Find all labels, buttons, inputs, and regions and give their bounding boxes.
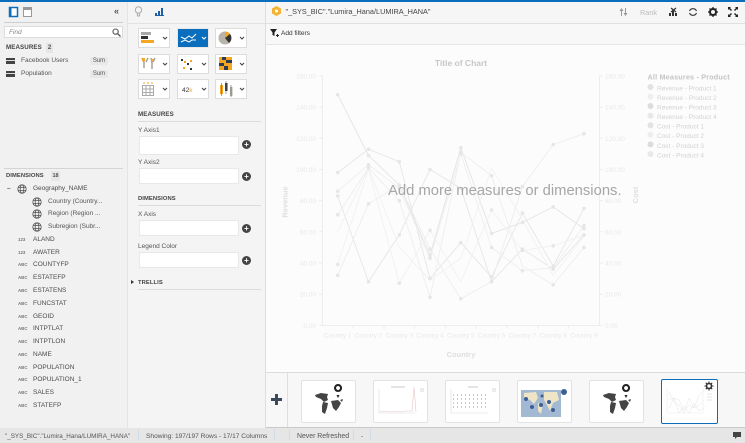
chart type: funnel <box>138 54 170 74</box>
add filters label: Add filters <box>281 30 310 36</box>
status separator <box>274 429 275 440</box>
series points <box>336 93 586 301</box>
hierarchy: Geography_NAME: Geography_NAME <box>33 185 88 192</box>
field: SALES: SALES <box>33 389 54 396</box>
axis titles: Country <box>447 350 476 359</box>
icon: bar chart tab <box>155 8 164 16</box>
measures count <box>46 43 53 53</box>
label: Legend Color: Legend Color <box>138 243 177 250</box>
add button: Y Axis1: + <box>244 140 249 149</box>
measures rule <box>138 121 261 122</box>
drop zone: Y Axis1 <box>139 136 239 155</box>
measures count: 2 <box>48 44 51 51</box>
thumbnail: empty map 1 <box>300 380 356 423</box>
icon: light bulb <box>134 6 142 16</box>
field: POPULATION_1: POPULATION_1 <box>33 376 82 383</box>
field: FUNCSTAT: ABC <box>18 300 28 306</box>
line chart <box>280 58 730 359</box>
field: NAME <box>18 350 52 358</box>
icon: search <box>112 28 121 37</box>
dimensions divider <box>4 168 123 169</box>
category labels: Country 2 <box>355 332 383 340</box>
add visualization button <box>271 394 282 405</box>
trellis heading: TRELLIS <box>138 280 163 286</box>
panel: chart configuration <box>128 2 266 428</box>
chart type: line (selected) <box>176 28 208 48</box>
field: ALAND: ALAND <box>33 236 55 242</box>
field: AWATER: AWATER <box>33 248 60 256</box>
axis titles <box>280 186 640 359</box>
field: STATEFP: STATEFP <box>33 402 61 408</box>
trellis rule <box>138 289 261 290</box>
icon: feedback <box>733 432 741 439</box>
category labels: Country 4 <box>416 332 444 340</box>
trellis expander <box>131 280 134 284</box>
field: INTPTLAT: INTPTLAT <box>33 325 63 332</box>
drop zone: Y Axis2 <box>139 168 239 184</box>
panel: header bar <box>266 2 745 24</box>
panel: status bar <box>0 428 745 443</box>
empty-state message: Add more measures or dimensions. <box>388 183 622 199</box>
series lines <box>338 95 584 299</box>
field: COUNTYFP: ABC <box>18 262 28 267</box>
label: X Axis: X Axis <box>138 210 156 218</box>
status separator <box>370 429 371 440</box>
chart type: numeric point: 42k <box>182 87 193 94</box>
left axis labels: 160.00 <box>296 74 316 80</box>
status: refresh state: Never Refreshed <box>297 432 349 440</box>
dimensions heading: DIMENSIONS <box>6 173 44 179</box>
level: Subregion: Subregion (Subr... <box>48 223 100 230</box>
left axis labels: 120.00 <box>296 136 316 143</box>
category labels: Country 5 <box>447 332 475 340</box>
add button: X Axis <box>242 224 251 233</box>
dimensions count: 18 <box>52 173 59 179</box>
drop zone: X Axis <box>139 220 239 236</box>
measure: Facebook Users: Facebook Users <box>21 57 68 64</box>
strip divider <box>287 373 288 427</box>
axis titles: Revenue <box>280 186 290 218</box>
field: ESTATEFP <box>18 274 66 281</box>
legend: Revenue - Product 4 <box>657 114 717 121</box>
field: GEOID <box>18 312 54 320</box>
add button: X Axis: + <box>244 224 249 233</box>
dataset name: "_SYS_BIC"."Lumira_Hana/LUMIRA_HANA" <box>286 6 431 16</box>
measure: Population <box>6 70 108 78</box>
icon: settings <box>708 7 718 17</box>
field: POPULATION_1: ABC <box>18 377 28 382</box>
field: SALES: ABC <box>18 390 28 395</box>
legend: All Measures - Product <box>648 72 730 82</box>
dimension list <box>7 184 102 408</box>
add button: Y Axis2 <box>242 172 251 181</box>
thumbnail: scatter chart <box>444 380 500 423</box>
thumbnail: line chart <box>372 380 428 423</box>
category labels: Country 6 <box>478 332 506 340</box>
field: FUNCSTAT <box>18 300 67 306</box>
level: Country: Country (Country... <box>48 198 102 204</box>
measure: Population: Population <box>21 70 52 77</box>
field: AWATER: 123 <box>18 250 25 254</box>
right axis labels: 60.00 <box>605 229 622 236</box>
divider <box>128 23 265 24</box>
left axis labels: 100.00 <box>296 167 316 174</box>
field: INTPTLAT <box>18 325 64 332</box>
level: Country <box>32 197 102 207</box>
icon: clear chart <box>669 8 677 16</box>
right axis labels: 160.00 <box>605 74 625 80</box>
dimensions count <box>51 171 60 181</box>
measure: Population: Sum <box>93 71 105 77</box>
legend: Revenue - Product 1 <box>657 86 717 92</box>
chart type: bar <box>138 28 170 48</box>
status separator <box>353 429 354 440</box>
field: ALAND <box>18 236 55 242</box>
hierarchy: Geography_NAME <box>7 184 88 194</box>
legend: Cost - Product 3 <box>657 143 704 150</box>
field: AWATER <box>18 248 60 256</box>
chart type: table <box>138 79 170 99</box>
icon: filter funnel <box>270 29 279 37</box>
status separator <box>289 429 290 440</box>
category labels: Country 1 <box>324 332 352 340</box>
measures section heading: MEASURES <box>138 110 174 118</box>
legend: Revenue - Product 3 <box>657 105 717 112</box>
icon: dataset hexagon <box>272 6 281 16</box>
rank label: Rank <box>640 8 657 17</box>
field: COUNTYFP: COUNTYFP <box>33 261 69 268</box>
legend: Cost - Product 2 <box>657 133 704 140</box>
category labels <box>324 332 598 340</box>
left axis labels: 40.00 <box>300 260 316 268</box>
label: Y Axis1: Y Axis1 <box>138 126 160 134</box>
field: INTPTLAT: ABC <box>18 326 28 331</box>
top accent bar <box>0 0 745 2</box>
legend: Cost - Product 4 <box>657 152 704 159</box>
chart type: box plot <box>215 79 247 99</box>
right axis labels: 120.00 <box>605 136 625 143</box>
add button: Legend Color <box>242 256 251 265</box>
field: ESTATENS: ESTATENS <box>33 287 66 294</box>
field: STATEFP: ABC <box>18 402 28 408</box>
icon: refresh <box>689 8 697 16</box>
legend: Revenue - Product 2 <box>657 95 717 102</box>
right axis labels: 100.00 <box>605 167 625 174</box>
thumbnail: empty map 2 <box>589 380 644 423</box>
collapse control: « <box>114 6 119 16</box>
legend <box>648 72 730 159</box>
field: ESTATEFP: ESTATEFP <box>33 274 66 281</box>
field: SALES <box>18 389 54 396</box>
field: NAME: ABC <box>18 352 28 356</box>
chart type: heat map <box>215 54 247 74</box>
search field <box>4 26 123 38</box>
measure: Facebook Users <box>6 57 108 65</box>
drop zone: Legend Color <box>139 252 239 268</box>
field: INTPTLON: ABC <box>18 339 28 344</box>
chart type: pie <box>215 28 247 48</box>
panel: chart canvas <box>266 45 745 372</box>
left axis labels: 140.00 <box>296 105 316 112</box>
measure: Facebook Users: Sum <box>93 58 105 64</box>
panel: visualization strip <box>266 372 745 428</box>
field: GEOID: ABC <box>18 314 28 318</box>
chart type: numeric point <box>176 79 208 99</box>
right axis labels: 20.00 <box>605 292 622 299</box>
search placeholder: Find <box>9 29 22 36</box>
dimensions rule <box>138 205 261 206</box>
divider <box>4 22 123 23</box>
add button: Legend Color: + <box>244 256 249 265</box>
field: STATEFP <box>18 402 61 408</box>
status: dataset: "_SYS_BIC"."Lumira_Hana/LUMIRA_HANA" <box>5 432 130 440</box>
field: ESTATENS: ABC <box>18 288 28 293</box>
field: ESTATEFP: ABC <box>18 275 28 280</box>
field: POPULATION: POPULATION <box>33 364 74 370</box>
right axis labels: 140.00 <box>605 105 625 112</box>
field: FUNCSTAT: FUNCSTAT <box>33 300 67 306</box>
status: rows and columns: Showing: 197/197 Rows - 17/17 Columns <box>146 432 267 440</box>
level: Region: Region (Region ... <box>48 210 100 217</box>
measures heading: MEASURES <box>6 44 42 51</box>
panel: filter bar <box>266 24 745 45</box>
icon: sort <box>620 8 628 16</box>
thumbnail: geo bubble map <box>516 380 572 423</box>
right axis labels: 40.00 <box>605 260 622 268</box>
axis titles: Cost <box>631 186 640 203</box>
field: INTPTLON <box>18 338 65 345</box>
field: ESTATENS <box>18 287 66 294</box>
field: NAME: NAME <box>33 350 52 358</box>
level: Region <box>32 209 100 219</box>
category labels: Country 7 <box>509 332 537 340</box>
category labels: Country 3 <box>386 332 413 340</box>
icon: panel tab active <box>8 6 32 18</box>
dimensions section heading: DIMENSIONS <box>138 196 176 202</box>
right axis labels <box>605 74 625 330</box>
level: Subregion <box>32 222 100 232</box>
field: GEOID: GEOID <box>33 312 54 320</box>
add button: Y Axis2: + <box>244 172 249 181</box>
label: Y Axis2: Y Axis2 <box>138 159 160 166</box>
category labels: Country 9 <box>570 332 598 340</box>
left axis labels: 20.00 <box>300 292 316 299</box>
axes <box>319 76 603 328</box>
field: ALAND: 123 <box>18 236 25 242</box>
status separator <box>138 429 139 440</box>
thumbnail: current chart (selected) <box>660 379 718 424</box>
right axis labels: 80.00 <box>605 198 622 205</box>
add button: Y Axis1 <box>242 140 251 149</box>
field: POPULATION: ABC <box>18 364 28 370</box>
chart type: scatter <box>176 54 208 74</box>
left axis labels: 80.00 <box>300 198 316 205</box>
field: INTPTLON: INTPTLON <box>33 338 65 345</box>
right axis labels: 0.00 <box>605 323 618 330</box>
left axis labels: 60.00 <box>300 229 316 236</box>
left axis labels: 0.00 <box>303 323 316 330</box>
panel: data sidebar <box>0 2 128 428</box>
left axis labels <box>296 74 316 330</box>
status: dash: - <box>361 432 363 440</box>
chart title: Title of Chart <box>435 58 487 68</box>
category labels: Country 8 <box>540 332 567 340</box>
icon: fullscreen <box>728 7 738 17</box>
legend: Cost - Product 1 <box>657 124 704 131</box>
hierarchy: Geography_NAME: – <box>7 185 11 192</box>
